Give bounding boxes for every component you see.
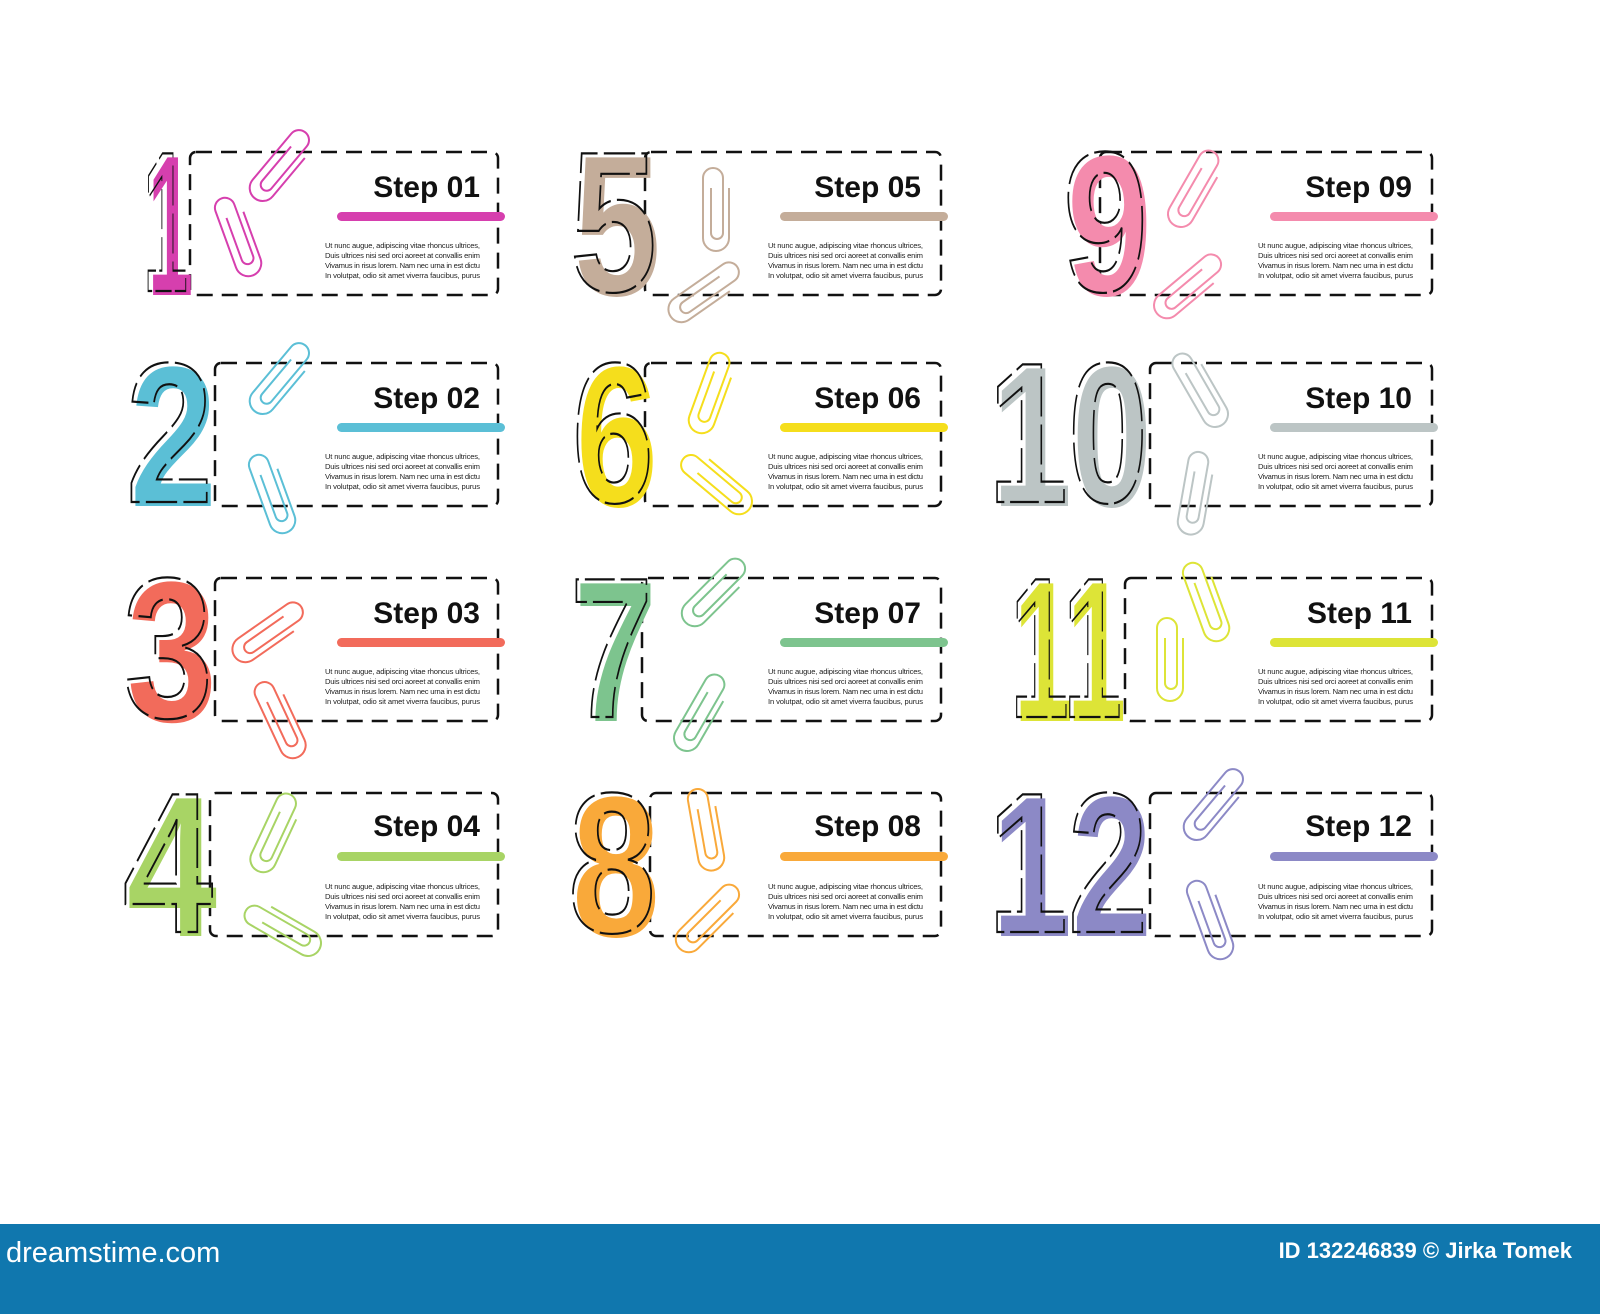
card: step 11: Ut nunc augue, adipiscing vitae rhoncus ultrices, <box>1258 667 1413 676</box>
card: step 08: Ut nunc augue, adipiscing vitae rhoncus ultrices, <box>768 882 923 891</box>
card: step 06: Duis ultrices nisi sed orci aoreet at convallis enim <box>768 462 923 471</box>
card: step 09: 9 <box>1063 111 1148 334</box>
card: step 08: In volutpat, odio sit amet viverra faucibus, purus <box>768 912 923 921</box>
card: step 01: 1 <box>143 111 188 334</box>
card: step 02: Vivamus in risus lorem. Nam nec urna in est dictu <box>325 472 480 481</box>
card: step 07: Vivamus in risus lorem. Nam nec urna in est dictu <box>768 687 923 696</box>
card: step 11: Duis ultrices nisi sed orci aoreet at convallis enim <box>1258 677 1413 686</box>
card: step 06: Vivamus in risus lorem. Nam nec urna in est dictu <box>768 472 923 481</box>
card: step 02: Duis ultrices nisi sed orci aoreet at convallis enim <box>325 462 480 471</box>
card: step 01: Step 01 <box>373 171 480 204</box>
card: step 01 <box>143 111 505 338</box>
card: step 05: 5 <box>570 111 657 334</box>
card: step 10: In volutpat, odio sit amet viverra faucibus, purus <box>1258 482 1413 491</box>
card: step 07: Ut nunc augue, adipiscing vitae rhoncus ultrices, <box>768 667 923 676</box>
card: step 05: Duis ultrices nisi sed orci aoreet at convallis enim <box>768 251 923 260</box>
card: step 10: Ut nunc augue, adipiscing vitae rhoncus ultrices, <box>1258 452 1413 461</box>
card: step 08: 8 <box>568 752 656 975</box>
card: step 12: Step 12 <box>1305 810 1412 843</box>
card: step 08: Duis ultrices nisi sed orci aoreet at convallis enim <box>768 892 923 901</box>
card: step 07: 7 <box>570 537 653 760</box>
card: step 10 <box>988 322 1438 549</box>
card: step 05: In volutpat, odio sit amet viverra faucibus, purus <box>768 271 923 280</box>
card: step 02 <box>126 322 505 549</box>
card: step 04: Duis ultrices nisi sed orci aoreet at convallis enim <box>325 892 480 901</box>
card: step 12: 12 <box>988 752 1148 975</box>
card: step 07: Duis ultrices nisi sed orci aoreet at convallis enim <box>768 677 923 686</box>
card: step 01: 1 <box>148 115 193 338</box>
card: step 06: 6 <box>576 326 658 549</box>
card: step 03: Vivamus in risus lorem. Nam nec urna in est dictu <box>325 687 480 696</box>
card: step 03: 3 <box>123 537 213 760</box>
card: step 12: 12 <box>992 756 1152 979</box>
card: step 06 <box>572 322 948 549</box>
card: step 09 <box>1063 111 1438 338</box>
card: step 04: In volutpat, odio sit amet viverra faucibus, purus <box>325 912 480 921</box>
card: step 04: Step 04 <box>373 810 480 843</box>
card: step 11: Step 11 <box>1307 597 1412 630</box>
card: step 07: In volutpat, odio sit amet viverra faucibus, purus <box>768 697 923 706</box>
card: step 04: 4 <box>127 756 217 979</box>
card: step 02: In volutpat, odio sit amet viverra faucibus, purus <box>325 482 480 491</box>
card: step 06: Ut nunc augue, adipiscing vitae rhoncus ultrices, <box>768 452 923 461</box>
card: step 03: Step 03 <box>373 597 480 630</box>
card: step 11 <box>1010 537 1438 764</box>
card: step 03: In volutpat, odio sit amet viverra faucibus, purus <box>325 697 480 706</box>
card: step 02: 2 <box>126 322 213 545</box>
card: step 10: Vivamus in risus lorem. Nam nec urna in est dictu <box>1258 472 1413 481</box>
card: step 10: Step 10 <box>1305 382 1412 415</box>
card: step 02: 2 <box>130 326 217 549</box>
card: step 09: Duis ultrices nisi sed orci aoreet at convallis enim <box>1258 251 1413 260</box>
card: step 10: 10 <box>992 326 1152 549</box>
card: step 06: Step 06 <box>814 382 921 415</box>
card: step 11: Vivamus in risus lorem. Nam nec urna in est dictu <box>1258 687 1413 696</box>
card: step 03: 3 <box>127 541 217 764</box>
card: step 10: Duis ultrices nisi sed orci aoreet at convallis enim <box>1258 462 1413 471</box>
card: step 11: 11 <box>1010 537 1122 760</box>
card: step 01: In volutpat, odio sit amet viverra faucibus, purus <box>325 271 480 280</box>
card: step 07 <box>570 537 948 764</box>
card: step 12: In volutpat, odio sit amet viverra faucibus, purus <box>1258 912 1413 921</box>
card: step 09: Step 09 <box>1305 171 1412 204</box>
card: step 10: 10 <box>988 322 1148 545</box>
card: step 11: 11 <box>1014 541 1126 764</box>
card: step 05: Ut nunc augue, adipiscing vitae rhoncus ultrices, <box>768 241 923 250</box>
card: step 02: Ut nunc augue, adipiscing vitae rhoncus ultrices, <box>325 452 480 461</box>
card: step 06: In volutpat, odio sit amet viverra faucibus, purus <box>768 482 923 491</box>
card: step 05: Vivamus in risus lorem. Nam nec urna in est dictu <box>768 261 923 270</box>
card: step 01: Ut nunc augue, adipiscing vitae rhoncus ultrices, <box>325 241 480 250</box>
card: step 09: In volutpat, odio sit amet viverra faucibus, purus <box>1258 271 1413 280</box>
card: step 12: Vivamus in risus lorem. Nam nec urna in est dictu <box>1258 902 1413 911</box>
card: step 05: Step 05 <box>814 171 921 204</box>
card: step 12: Ut nunc augue, adipiscing vitae rhoncus ultrices, <box>1258 882 1413 891</box>
card: step 07: 7 <box>574 541 657 764</box>
card: step 08 <box>568 752 948 979</box>
card: step 11: In volutpat, odio sit amet viverra faucibus, purus <box>1258 697 1413 706</box>
card: step 04: 4 <box>123 752 213 975</box>
card: step 09: Vivamus in risus lorem. Nam nec urna in est dictu <box>1258 261 1413 270</box>
card: step 12: Duis ultrices nisi sed orci aoreet at convallis enim <box>1258 892 1413 901</box>
footer bar <box>0 1224 1600 1314</box>
card: step 05: 5 <box>574 115 661 338</box>
card: step 03 <box>123 537 505 764</box>
card: step 06: 6 <box>572 322 654 545</box>
card: step 08: Step 08 <box>814 810 921 843</box>
footer bar: dreamstime.com <box>6 1237 220 1269</box>
card: step 03: Ut nunc augue, adipiscing vitae rhoncus ultrices, <box>325 667 480 676</box>
card: step 09: 9 <box>1067 115 1152 338</box>
card: step 12 <box>988 752 1438 979</box>
card: step 04: Vivamus in risus lorem. Nam nec urna in est dictu <box>325 902 480 911</box>
card: step 08: 8 <box>572 756 660 979</box>
card: step 05 <box>570 111 948 338</box>
card: step 01: Vivamus in risus lorem. Nam nec urna in est dictu <box>325 261 480 270</box>
card: step 01: Duis ultrices nisi sed orci aoreet at convallis enim <box>325 251 480 260</box>
card: step 02: Step 02 <box>373 382 480 415</box>
card: step 03: Duis ultrices nisi sed orci aoreet at convallis enim <box>325 677 480 686</box>
footer bar: ID 132246839 © Jirka Tomek <box>1279 1238 1573 1263</box>
card: step 07: Step 07 <box>814 597 921 630</box>
card: step 09: Ut nunc augue, adipiscing vitae rhoncus ultrices, <box>1258 241 1413 250</box>
card: step 08: Vivamus in risus lorem. Nam nec urna in est dictu <box>768 902 923 911</box>
card: step 04: Ut nunc augue, adipiscing vitae rhoncus ultrices, <box>325 882 480 891</box>
card: step 04 <box>123 752 505 979</box>
